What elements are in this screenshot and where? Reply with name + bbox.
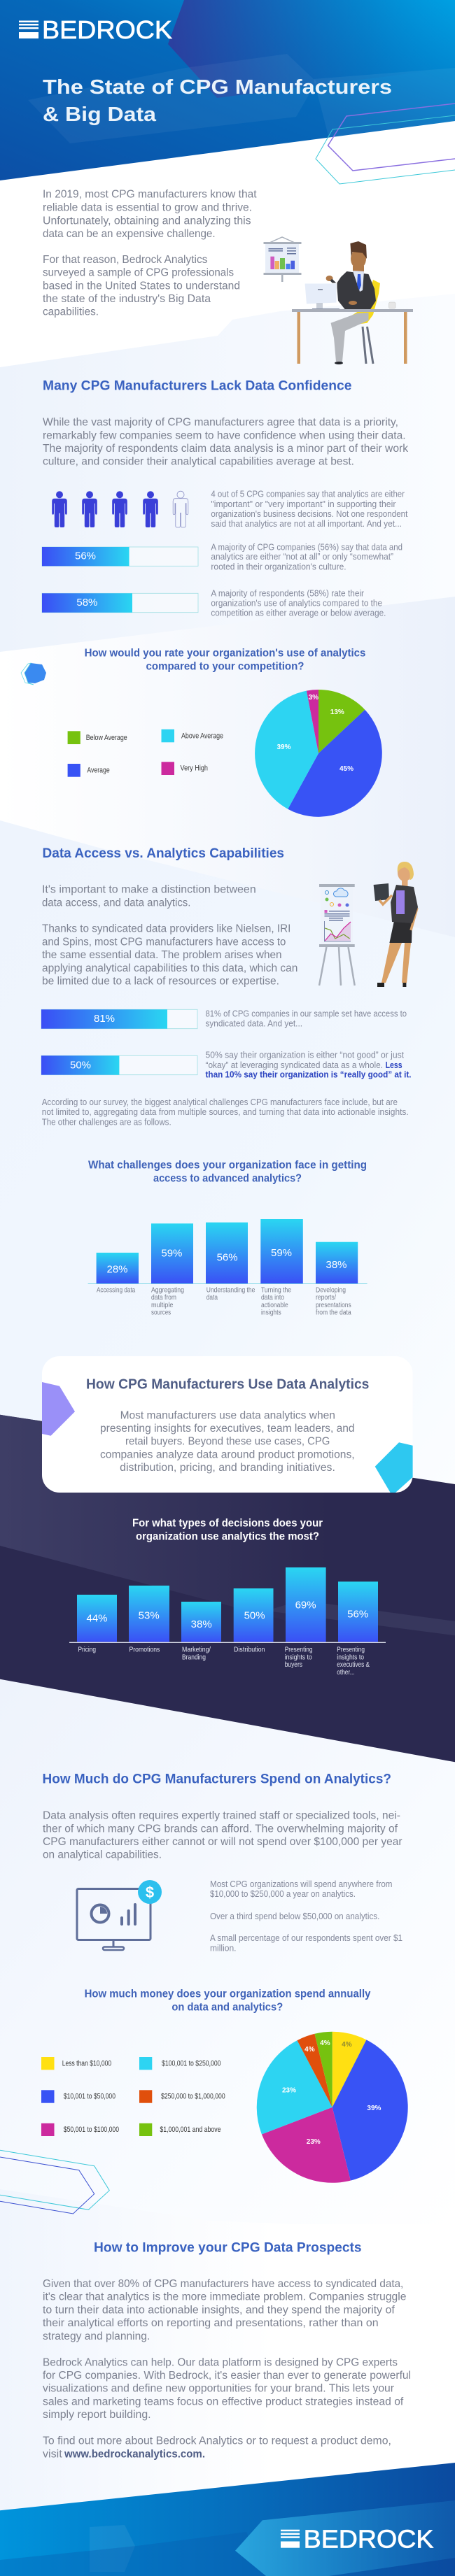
- question: competition rating: [85, 647, 365, 672]
- legend: spend: $1,000,001 and above: [160, 2126, 221, 2134]
- title: The State of CPG Manufacturers: [43, 76, 392, 99]
- pie chart: spend: 23%: [307, 2138, 321, 2146]
- legend: spend: $10,001 to $50,000: [64, 2093, 115, 2101]
- text: improve body: simply report building.: [43, 2409, 151, 2421]
- bar chart: decisions: Distribution: [234, 1645, 265, 1653]
- text: improve body: [43, 2278, 411, 2460]
- text: improve body: Given that over 80% of CPG manufacturers have access to syndicated data,: [43, 2278, 403, 2290]
- bar chart: challenges: reports/: [316, 1293, 336, 1302]
- card heading: How CPG Manufacturers Use Data Analytics: [86, 1377, 369, 1393]
- text: biggest challenges: not limited to, aggregating data from multiple sources, and turning that data into actionable insights.: [42, 1107, 409, 1117]
- intro text: data can be an expensive challenge.: [43, 228, 216, 240]
- title: [43, 76, 392, 126]
- text: 56%: rooted in their organization's culture.: [211, 562, 346, 572]
- text: spend intro: [43, 1810, 402, 1861]
- section: lack of data confidence: [42, 379, 408, 618]
- text: 81%: [206, 1009, 407, 1029]
- progress bar 58%: [42, 593, 198, 613]
- question: challenges: [88, 1160, 367, 1184]
- text: 56%: [211, 543, 402, 572]
- legend: competition rating: Average: [87, 766, 110, 774]
- text: improve body: visualizations and define new opportunities for your brand. This lets your: [43, 2383, 394, 2395]
- dark band background: [0, 1415, 455, 1762]
- paragraph: While the vast majority of CPG manufacturers agree that data is a priority,: [43, 416, 398, 428]
- text: 4 out of 5: [211, 490, 408, 529]
- text: spend facts: A small percentage of our respondents spent over $1: [210, 1933, 402, 1943]
- intro text: reliable data is essential to grow and thrive.: [43, 201, 252, 213]
- paragraph: remarkably few companies seem to have confidence when using their data.: [43, 429, 406, 441]
- pie chart: competition rating: 3%: [309, 694, 318, 702]
- bar chart: decisions: 53%: [139, 1609, 160, 1621]
- intro text: Unfortunately, obtaining and analyzing this: [43, 215, 251, 227]
- question: challenges: What challenges does your organization face in getting: [88, 1160, 367, 1172]
- decorative hexagon outlines, lower left: [0, 2150, 109, 2214]
- title: & Big Data: [43, 104, 157, 126]
- intro text: [43, 189, 257, 318]
- bar chart: challenges: sources: [151, 1309, 171, 1317]
- text: 81%: syndicated data. And yet...: [206, 1019, 302, 1029]
- bar chart: decisions: 44%: [86, 1612, 108, 1624]
- card text: presenting insights for executives, team leaders, and: [100, 1423, 355, 1435]
- icon: monitor with dollar: [77, 1880, 162, 1950]
- text: data access intro: [42, 884, 298, 988]
- bar chart: decisions: [69, 1567, 386, 1677]
- bar chart: decisions: other...: [337, 1668, 355, 1677]
- heading: Many CPG Manufacturers Lack Data Confidence: [43, 379, 351, 394]
- legend: spend: $250,000 to $1,000,000: [161, 2093, 225, 2101]
- text: improve body: strategy and planning.: [43, 2331, 150, 2342]
- pie chart: competition rating: [255, 690, 382, 817]
- bar chart: decisions: 56%: [347, 1609, 368, 1621]
- text: 4 out of 5: "important" or "very important" in supporting their: [211, 499, 396, 509]
- text: 4 out of 5: 4 out of 5 CPG companies say that analytics are either: [211, 490, 405, 499]
- progress bar 50%: [41, 1055, 197, 1075]
- bar chart: decisions: Promotions: [129, 1645, 160, 1653]
- bar chart: challenges: [88, 1219, 368, 1317]
- bar chart: challenges: insights: [261, 1309, 281, 1317]
- text: improve body: visit: [43, 2448, 62, 2460]
- card text: [100, 1409, 355, 1474]
- legend: competition rating: [68, 730, 223, 777]
- intro text: For that reason, Bedrock Analytics: [43, 254, 208, 266]
- text: 50%: 50% say their organization is either “not good” or just: [206, 1051, 404, 1060]
- bar chart: challenges: Understanding the: [206, 1286, 255, 1294]
- text: spend intro: ther of which many CPG brands can afford. The overwhelming majority of: [43, 1823, 398, 1835]
- pie chart: spend: 4%: [342, 2041, 352, 2049]
- pie chart: spend: 23%: [282, 2087, 296, 2095]
- icon: monitor with dollar: $: [146, 1884, 154, 1901]
- illustration: flip chart: [319, 884, 355, 985]
- bar chart: decisions: insights to: [337, 1653, 364, 1661]
- text: 58%: organization's use of analytics compared to the: [211, 599, 382, 609]
- text: spend facts: million.: [210, 1943, 237, 1953]
- text: 81%: 81% of CPG companies in our sample set have access to: [206, 1009, 407, 1018]
- intro text: the state of the industry's Big Data: [43, 293, 211, 305]
- pie chart: spend: [257, 2032, 408, 2183]
- legend: spend: Less than $10,000: [62, 2059, 111, 2068]
- bar chart: challenges: 59%: [161, 1248, 182, 1260]
- pie chart: spend: 4%: [304, 2046, 315, 2054]
- bar chart: decisions: 69%: [295, 1599, 316, 1611]
- bar chart: decisions: executives &: [337, 1660, 370, 1669]
- progress bar 56%: 56%: [75, 550, 96, 562]
- heading: improve: How to Improve your CPG Data Prospects: [94, 2240, 362, 2255]
- bar chart: decisions: 50%: [244, 1609, 265, 1621]
- text: 50%: [206, 1051, 412, 1080]
- intro text: capabilities.: [43, 306, 99, 318]
- illustration: presentation board: [263, 237, 301, 282]
- logo: Bedrock footer: BEDROCK: [304, 2525, 433, 2554]
- text: improve body: Bedrock Analytics can help. Our data platform is designed by CPG experts: [43, 2356, 398, 2368]
- bar chart: decisions: Presenting: [337, 1645, 365, 1653]
- text: spend facts: Most CPG organizations will spend anywhere from: [210, 1879, 392, 1889]
- intro text: based in the United States to understand: [43, 280, 240, 292]
- bar chart: challenges: data into: [261, 1293, 284, 1302]
- intro text: In 2019, most CPG manufacturers know that: [43, 189, 257, 201]
- bar chart: decisions: 38%: [191, 1618, 212, 1630]
- bar chart: decisions: Branding: [182, 1653, 206, 1661]
- heading: data access: Data Access vs. Analytics Capabilities: [42, 846, 284, 861]
- illustration: man at desk: [292, 241, 413, 364]
- decorative hexagon outlines: [316, 104, 455, 184]
- question: decisions: [132, 1518, 323, 1542]
- text: 50%: “okay” at leveraging syndicated data as a whole.: [206, 1060, 383, 1070]
- paragraph: culture, and consider their analytical capabilities average at best.: [43, 456, 354, 468]
- text: 50%: than 10% say their organization is “really good” at it.: [206, 1070, 412, 1080]
- text: spend intro: CPG manufacturers either cannot or will not spend over $100,000 per year: [43, 1836, 402, 1848]
- question: spend: [85, 1988, 370, 2013]
- text: data access intro: the same essential data. The problem arises when: [42, 949, 282, 961]
- question: challenges: access to advanced analytics?: [153, 1172, 302, 1184]
- text: spend facts: Over a third spend below $50,000 on analytics.: [210, 1912, 379, 1921]
- card text: retail buyers. Beyond these use cases, CPG: [125, 1436, 330, 1448]
- bar chart: challenges: 56%: [217, 1251, 238, 1263]
- progress bar 56%: [42, 547, 198, 566]
- progress bar 50%: 50%: [70, 1059, 91, 1071]
- paragraph: [43, 416, 408, 468]
- bar chart: challenges: data: [206, 1293, 218, 1302]
- text: spend intro: Data analysis often requires expertly trained staff or specialized tools, nei-: [43, 1810, 400, 1822]
- text: biggest challenges: According to our survey, the biggest analytical challenges CPG manufacturers face include, but are: [42, 1097, 398, 1107]
- pie chart: competition rating: 13%: [330, 709, 344, 716]
- intro text: surveyed a sample of CPG professionals: [43, 267, 234, 279]
- question: decisions: For what types of decisions does your: [132, 1518, 323, 1530]
- card text: companies analyze data around product promotions,: [100, 1449, 355, 1460]
- text: improve body: sales and marketing teams focus on effective product strategies instead of: [43, 2396, 404, 2407]
- decor: cyan hexagon: [375, 1442, 413, 1493]
- question: spend: How much money does your organization spend annually: [85, 1988, 370, 2000]
- text: data access intro: applying analytical capabilities to this data, which can: [42, 962, 298, 974]
- bar chart: challenges: 59%: [271, 1247, 292, 1259]
- text: biggest challenges: [42, 1097, 409, 1127]
- decor: purple hexagon: [42, 1382, 75, 1436]
- text: improve body: their analytical efforts on reporting and presentations, rather than on: [43, 2317, 379, 2329]
- progress bar 81%: [41, 1009, 197, 1029]
- text: 56%: analytics are either “not at all” or only “somewhat”: [211, 552, 393, 562]
- question: competition rating: How would you rate your organization's use of analytics: [85, 647, 365, 659]
- bar chart: challenges: 28%: [106, 1263, 128, 1275]
- illustration: woman with tablet: [374, 862, 418, 987]
- text: data access intro: Thanks to syndicated data providers like Nielsen, IRI: [42, 923, 290, 935]
- card text: Most manufacturers use data analytics when: [120, 1409, 335, 1421]
- question: competition rating: compared to your competition?: [146, 660, 304, 672]
- question: decisions: organization use analytics the most?: [136, 1530, 319, 1542]
- bar chart: decisions: Marketing/: [182, 1645, 211, 1653]
- text: data access intro: be limited due to a lack of resources or expertise.: [42, 976, 279, 988]
- icon: small hexagon: [21, 663, 46, 685]
- legend: competition rating: Very High: [181, 764, 208, 773]
- legend: competition rating: Below Average: [86, 734, 127, 742]
- pie chart: competition rating: 39%: [276, 743, 291, 751]
- text: improve body: To find out more about Bedrock Analytics or to request a product demo,: [43, 2435, 391, 2447]
- bar chart: challenges: Turning the: [261, 1286, 291, 1294]
- bar chart: challenges: data from: [151, 1293, 176, 1302]
- progress bar 58%: 58%: [76, 597, 97, 609]
- progress bar 81%: 81%: [94, 1013, 115, 1025]
- pie chart: spend: 4%: [320, 2040, 330, 2047]
- bar chart: challenges: from the data: [316, 1309, 351, 1317]
- bar chart: decisions: insights to: [285, 1653, 312, 1661]
- text: improve body: www.bedrockanalytics.com.: [64, 2448, 205, 2460]
- pie chart: competition rating: 45%: [340, 765, 354, 773]
- bar chart: challenges: presentations: [316, 1301, 351, 1309]
- header banner: [0, 0, 455, 180]
- panel: how manufacturers use analytics: [42, 1356, 413, 1493]
- text: spend facts: $10,000 to $250,000 a year on analytics.: [210, 1889, 356, 1899]
- legend: spend: $50,001 to $100,000: [64, 2126, 119, 2134]
- bar chart: challenges: Aggregating: [151, 1286, 184, 1294]
- bar chart: decisions: buyers: [285, 1660, 302, 1669]
- text: data access intro: data access, and data analytics.: [42, 897, 190, 909]
- text: 58%: A majority of respondents (58%) rate their: [211, 588, 364, 598]
- text: improve body: to turn their data into actionable insights, and they spend the majority of: [43, 2304, 396, 2316]
- pie chart: spend: 39%: [367, 2105, 382, 2112]
- bar chart: decisions: Presenting: [285, 1645, 313, 1653]
- text: 56%: A majority of CPG companies (56%) say that data and: [211, 543, 402, 553]
- text: biggest challenges: The other challenges are as follows.: [42, 1117, 172, 1127]
- question: spend: on data and analytics?: [172, 2001, 283, 2013]
- legend: competition rating: Above Average: [181, 732, 223, 740]
- bar chart: decisions: Pricing: [78, 1645, 96, 1653]
- text: data access intro: It's important to make a distinction between: [42, 884, 256, 896]
- text: improve body: for CPG companies. With Bedrock, it's easier than ever to generate powerful: [43, 2370, 411, 2382]
- card text: distribution, pricing, and branding initiatives.: [120, 1462, 335, 1474]
- text: 4 out of 5: said that analytics are not at all important. And yet...: [211, 519, 402, 529]
- text: 58%: competition as either average or below average.: [211, 609, 386, 618]
- text: 50%: Less: [386, 1060, 402, 1070]
- text: 58%: [211, 588, 386, 618]
- text: spend facts: [210, 1879, 402, 1953]
- text: spend intro: on analytical capabilities.: [43, 1849, 162, 1861]
- legend: spend: $100,001 to $250,000: [162, 2059, 221, 2068]
- bar chart: challenges: 38%: [326, 1259, 347, 1271]
- legend: spend: [41, 2057, 225, 2136]
- logo: Bedrock: BEDROCK: [42, 15, 172, 44]
- text: improve body: it's clear that analytics is the more immediate problem. Companies struggle: [43, 2291, 406, 2303]
- paragraph: The majority of respondents claim data analysis is a minor part of their work: [43, 443, 408, 455]
- heading: spend: How Much do CPG Manufacturers Spend on Analytics?: [42, 1772, 391, 1786]
- text: 4 out of 5: organization's business decisions. Not one respondent: [211, 509, 408, 519]
- text: data access intro: and Spins, most CPG manufacturers have access to: [42, 936, 286, 948]
- bar chart: challenges: multiple: [151, 1301, 174, 1309]
- bar chart: challenges: actionable: [261, 1301, 288, 1309]
- bar chart: challenges: Accessing data: [97, 1286, 135, 1294]
- bar chart: challenges: Developing: [316, 1286, 346, 1294]
- icon: 4 of 5 people: [52, 491, 188, 527]
- footer banner: [0, 2463, 455, 2576]
